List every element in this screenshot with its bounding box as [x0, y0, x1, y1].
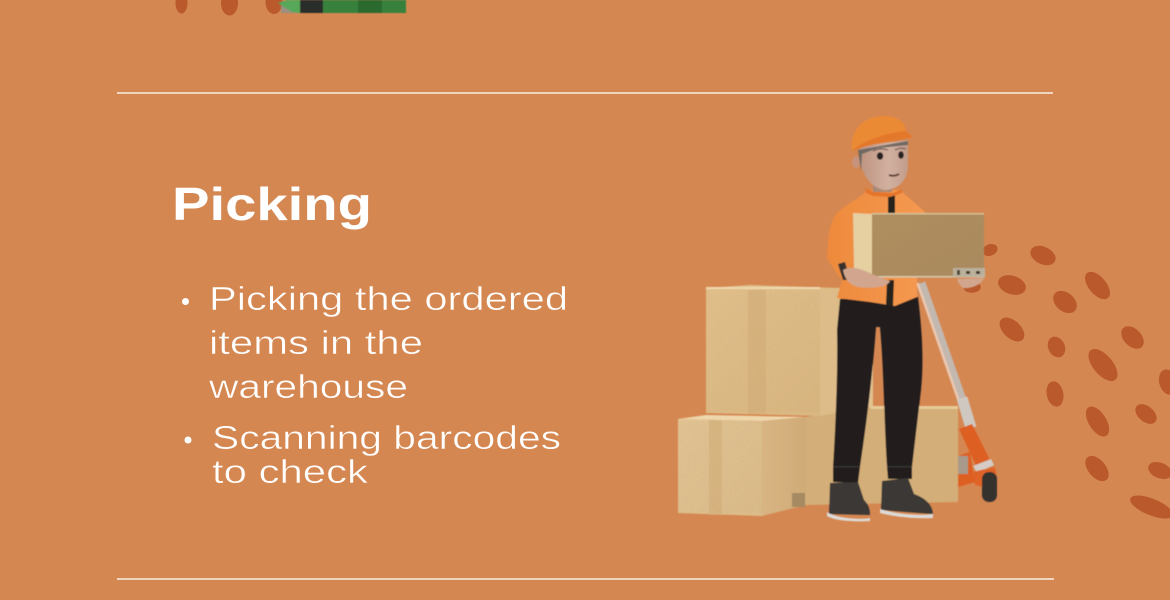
worker head: [852, 140, 908, 192]
box: back right: [806, 406, 958, 505]
bullet item: scanning barcodes: [184, 419, 561, 490]
worker hands: [838, 262, 984, 288]
cropped green illustration from the previous section: [278, 0, 406, 13]
held box: [853, 213, 985, 278]
bullet list: [182, 280, 568, 490]
box: front bottom: [678, 415, 806, 516]
bullet item: picking the ordered items: Picking the ordered: [209, 280, 568, 317]
bullet item: picking the ordered items: items in the: [209, 324, 423, 361]
worker jacket: [827, 188, 928, 306]
bullet item: scanning barcodes: to check: [212, 453, 369, 490]
worker shoes: [827, 478, 933, 521]
decorative dots: right side: [964, 243, 1170, 522]
top divider: [117, 92, 1053, 94]
heading: Picking: Picking: [172, 178, 372, 230]
bullet item: picking the ordered items: [182, 280, 568, 405]
box: stacked top: [706, 285, 873, 416]
bullet item: scanning barcodes: Scanning barcodes: [212, 419, 561, 456]
bullet item: picking the ordered items: warehouse: [208, 368, 408, 405]
hand truck: [918, 283, 997, 502]
cardboard grain overlay: [678, 215, 984, 513]
cropped decorative dots from the previous section: [176, 0, 282, 15]
worker legs: [833, 297, 922, 483]
bottom divider: [117, 578, 1054, 580]
worker cap: [852, 116, 913, 151]
illustration: delivery worker with boxes and hand truck: [678, 116, 997, 521]
